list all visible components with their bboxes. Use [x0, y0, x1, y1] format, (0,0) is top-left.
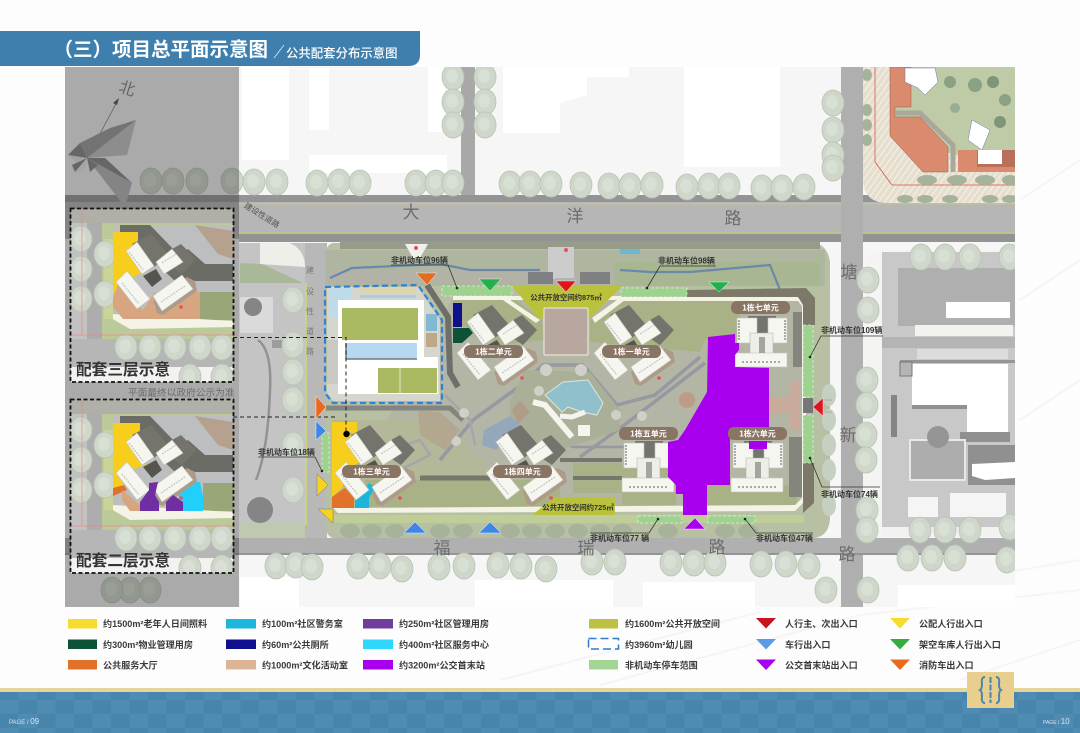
header bar [0, 31, 420, 66]
road name labels: 建 [306, 265, 314, 275]
unit label 1栋四单元: 1栋四单元 [504, 466, 541, 476]
legend: functions: 约400m²社区服务中心 [399, 639, 489, 650]
internal roads and paths [326, 285, 705, 478]
tan square plaza [544, 308, 588, 355]
public open space 725 [532, 497, 615, 515]
legend: functions: 约1500m²老年人日间照料 [103, 618, 207, 629]
parking callout 77 [590, 518, 659, 543]
legend: space types: 约3960m²幼儿园 [625, 639, 693, 650]
legend: entrances: 公配人行出入口 [919, 618, 983, 629]
unit 1 tower [594, 305, 675, 386]
public open space 875 [512, 286, 622, 320]
roads [65, 67, 1015, 607]
unit 6 tower [731, 441, 783, 492]
road name labels: 道 [306, 326, 314, 336]
parking callout 98: 非机动车位98辆 [658, 256, 715, 266]
parking callout 47: 非机动车位47辆 [756, 533, 813, 543]
approval note on overlay: 平面最终以政府公示为准 [128, 386, 235, 399]
title: （三）项目总平面示意图 [54, 38, 268, 61]
parking callout 18 [258, 447, 323, 472]
road name labels: 新 [840, 426, 856, 445]
unit 7 tower [735, 316, 787, 367]
unit label 1栋六单元: 1栋六单元 [739, 428, 776, 438]
parking callout 96: 非机动车位96辆 [391, 255, 448, 265]
legend: space types: 非机动车停车范围 [625, 660, 698, 670]
function areas under towers [332, 303, 473, 508]
unit label 1栋二单元 [464, 345, 523, 358]
legend: space types [588, 618, 720, 670]
legend: entrances: 车行出入口 [785, 639, 830, 650]
road name labels: 瑞 [578, 539, 594, 558]
road name labels: 路 [724, 209, 742, 228]
inset panel: second floor [70, 400, 234, 581]
legend: entrances: 人行主、次出入口 [785, 618, 858, 629]
site plan map [65, 64, 1021, 607]
heading: second floor: 配套二层示意 [76, 551, 170, 570]
parking callout 18: 非机动车位18辆 [258, 447, 315, 457]
surrounding city blocks [898, 585, 1015, 607]
road name labels: 福 [434, 539, 450, 558]
unit 3 tower [335, 425, 416, 506]
legend: entrances: 消防车出入口 [919, 660, 974, 670]
road name labels: 路 [708, 538, 726, 557]
legend: functions: 约100m²社区警务室 [262, 618, 343, 629]
dashed leader lines from insets [233, 338, 350, 437]
road name labels: 设 [306, 286, 314, 296]
legend: functions: 约250m²社区管理用房 [399, 618, 489, 629]
parking callout 77: 非机动车位77 辆 [590, 533, 649, 543]
parking callout 74 [809, 457, 880, 499]
unit 4 tower [486, 425, 567, 506]
east tan entrance plaza [770, 382, 832, 430]
unit label 1栋三单元: 1栋三单元 [353, 466, 390, 476]
unit label 1栋一单元 [602, 345, 661, 358]
legend: functions: 约300m²物业管理用房 [103, 639, 193, 650]
parking callout 74: 非机动车位74辆 [821, 489, 878, 499]
unit label 1栋三单元 [342, 465, 401, 478]
page number left: PAGE / 09 [9, 717, 40, 726]
road name labels: 路 [838, 545, 856, 564]
public open space 875: 公共开放空间约875㎡ [530, 293, 602, 302]
inset panel: third floor [70, 208, 234, 390]
parking callout 96 [391, 255, 458, 289]
non-motor parking strips [322, 286, 813, 523]
left grey overlay [65, 67, 239, 607]
unit label 1栋七单元: 1栋七单元 [742, 302, 779, 312]
subtitle: 公共配套分布示意图 [286, 46, 398, 60]
dark side wings near east units [789, 312, 802, 497]
site ground [325, 241, 836, 538]
road name labels: 建设性道路 [242, 200, 282, 230]
legend: functions: 公共服务大厅 [103, 660, 158, 670]
northeast neighbouring plot [862, 67, 1018, 203]
public open space 725: 公共开放空间约725㎡ [542, 503, 614, 512]
road name labels [242, 200, 858, 564]
road name labels: 洋 [566, 207, 584, 226]
footer logo [967, 672, 1014, 708]
legend: space types: 约1600m²公共开放空间 [625, 618, 720, 629]
unit label 1栋七单元 [731, 301, 790, 314]
legend: entrances [756, 618, 1001, 670]
parking callout 98 [646, 256, 716, 289]
parking callout 109: 非机动车位109辆 [821, 325, 882, 335]
heading: third floor: 配套三层示意 [76, 360, 170, 379]
page number right: PAGE / 10 [1043, 717, 1070, 726]
west green plot [239, 243, 306, 538]
legend: functions: 约60m²公共厕所 [262, 639, 329, 650]
central garden and pond [418, 364, 695, 450]
unit label 1栋二单元: 1栋二单元 [475, 346, 512, 356]
legend: entrances: 架空车库人行出入口 [919, 639, 1001, 650]
road name labels: 大 [402, 203, 420, 222]
bus terminal purple area [668, 334, 769, 515]
legend: functions: 约3200m²公交首末站 [399, 660, 485, 670]
compass north arrow: 北 [117, 78, 137, 100]
road name labels: 性 [306, 306, 314, 316]
legend: functions: 约1000m²文化活动室 [262, 660, 348, 670]
unit label 1栋一单元: 1栋一单元 [613, 346, 650, 356]
parking callout 47 [744, 518, 813, 543]
road name labels: 路 [306, 346, 314, 356]
east neighbouring plot [882, 252, 1015, 527]
kindergarten [325, 285, 442, 403]
brown edge paths [687, 288, 815, 513]
legend: entrances: 公交首末站出入口 [785, 660, 858, 670]
entrance markers [316, 273, 823, 533]
footer band [0, 688, 1080, 733]
unit label 1栋六单元 [728, 427, 787, 440]
unit 2 tower [457, 305, 538, 386]
compass north arrow [68, 78, 137, 207]
unit 5 tower [622, 441, 674, 492]
unit label 1栋五单元: 1栋五单元 [630, 428, 667, 438]
parking callout 109 [809, 325, 883, 358]
unit label 1栋四单元 [493, 465, 552, 478]
road name labels: 塘 [840, 263, 858, 282]
street trees [101, 64, 1021, 603]
legend: functions [68, 618, 489, 670]
unit label 1栋五单元 [619, 427, 678, 440]
